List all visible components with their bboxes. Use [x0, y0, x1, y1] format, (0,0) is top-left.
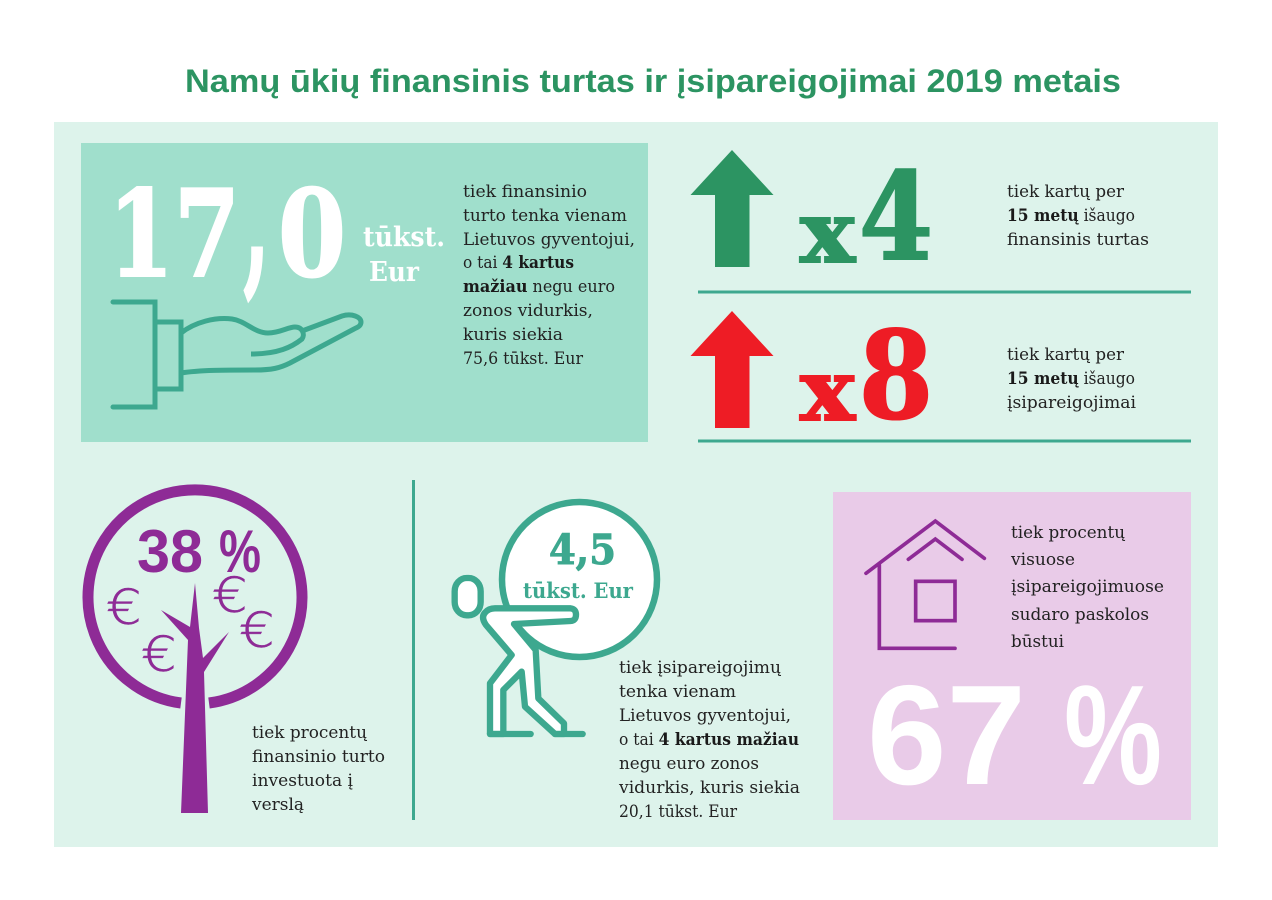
description text: Lietuvos gyventojui, [619, 706, 791, 725]
description text: tiek įsipareigojimų [619, 658, 781, 677]
value 38 %: % [219, 518, 261, 585]
panel: liabilities x8 [690, 304, 1136, 447]
big number 17,0: 0 [278, 164, 346, 305]
description text [618, 658, 800, 821]
description text [463, 182, 635, 368]
description text: tiek kartų per [1007, 345, 1124, 364]
description text: tiek finansinio [463, 182, 587, 201]
icon: house [866, 521, 984, 648]
icon: euro signs [106, 568, 275, 683]
icon: euro signs: € [141, 627, 177, 683]
background panel [54, 122, 1218, 847]
description text: 20,1 tūkst. Eur [619, 802, 737, 821]
icon: burden circle [502, 502, 657, 657]
icon: tree trunk [161, 583, 229, 813]
value 38 %: 38 [137, 518, 203, 585]
description text: o tai 4 kartus [463, 253, 574, 272]
description text: sudaro paskolos [1011, 605, 1149, 624]
panel: 67 % housing loans [833, 492, 1191, 820]
description text: investuota į [252, 771, 353, 790]
description text: 75,6 tūkst. Eur [463, 349, 583, 368]
description text: tiek procentų [252, 723, 367, 742]
icon: open hand [113, 302, 361, 407]
number x4: 4 [859, 145, 933, 288]
value 67 % [867, 656, 1162, 815]
description text: turto tenka vienam [463, 206, 627, 225]
number x4 [800, 145, 933, 288]
description text: įsipareigojimai [1007, 393, 1136, 412]
value 38 % [137, 518, 261, 585]
unit label: Eur [369, 257, 420, 288]
arrow: green up [690, 150, 774, 267]
description text: o tai 4 kartus mažiau [619, 730, 799, 749]
icon: euro signs: € [212, 568, 248, 624]
description text: zonos vidurkis, [463, 301, 593, 320]
description text: vidurkis, kuris siekia [618, 778, 800, 797]
description text: 15 metų išaugo [1007, 369, 1135, 388]
panel: 38 % tree [88, 490, 385, 814]
description text: įsipareigojimuose [1011, 577, 1164, 596]
description text: finansinio turto [252, 747, 385, 766]
value 67 %: % [1064, 656, 1162, 815]
big number 17,0: 17 [108, 164, 240, 305]
icon: euro signs: € [106, 580, 142, 636]
description text: būstui [1011, 632, 1064, 651]
description text: tiek procentų [1011, 523, 1125, 542]
big number 17,0: , [243, 115, 270, 315]
unit label [363, 222, 445, 288]
number x8: 8 [859, 304, 933, 447]
big number 17,0 [108, 115, 346, 315]
description text: tenka vienam [619, 682, 736, 701]
description text: mažiau negu euro [463, 277, 615, 296]
description text: verslą [251, 795, 304, 814]
description text: kuris siekia [463, 325, 563, 344]
description text: Lietuvos gyventojui, [463, 230, 635, 249]
icon: tree crown ring [88, 490, 302, 703]
panel: financial assets x4 [690, 145, 1149, 288]
description text: 15 metų išaugo [1007, 206, 1135, 225]
icon: euro signs: € [239, 603, 275, 659]
description text: negu euro zonos [619, 754, 759, 773]
description text [1007, 345, 1136, 412]
title: Namų ūkių finansinis turtas ir įsipareigojimai 2019 metais [185, 63, 1121, 99]
value 67 %: 67 [867, 656, 1026, 815]
description text: finansinis turtas [1007, 230, 1149, 249]
icon: person carrying load [455, 578, 583, 734]
unit label: tūkst. Eur [523, 579, 634, 604]
number x8 [800, 304, 933, 447]
arrow: red up [690, 311, 774, 428]
panel: 17,0 thousand Eur per resident [81, 115, 648, 442]
number x8: x [800, 341, 856, 440]
description text [1010, 523, 1164, 651]
unit label: tūkst. [363, 222, 445, 253]
description text: tiek kartų per [1007, 182, 1124, 201]
description text: visuose [1010, 550, 1075, 569]
description text [251, 723, 385, 814]
description text [1007, 182, 1149, 249]
value 4,5: 4,5 [549, 526, 616, 574]
number x4: x [800, 183, 856, 282]
panel: 4,5 thousand Eur liabilities [455, 502, 800, 821]
